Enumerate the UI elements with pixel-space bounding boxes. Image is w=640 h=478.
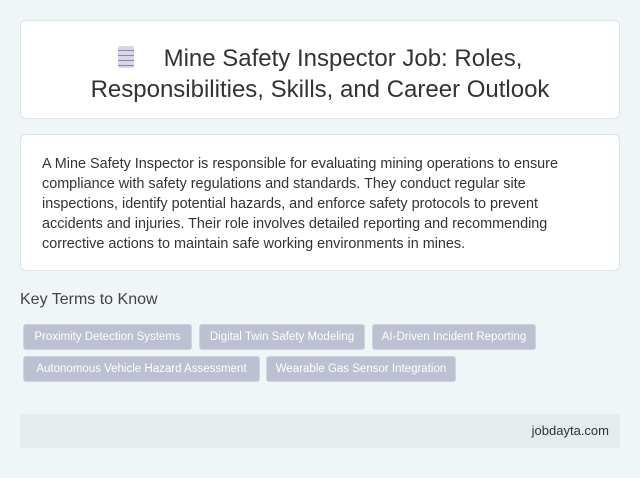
heading: key terms: Key Terms to Know	[20, 291, 158, 308]
icon: document	[118, 46, 134, 68]
description text: A Mine Safety Inspector is responsible for evaluating mining operations to ensure compliance with safety regulations and standards. They conduct regular site inspections, identify potential hazards, and enforce safety protocols to prevent accidents and injuries. Their role involves detailed reporting and recommending corrective actions to maintain safe working environments in mines.	[42, 156, 558, 252]
tag 4	[23, 356, 260, 382]
tag 2: Digital Twin Safety Modeling	[210, 331, 354, 343]
title	[91, 45, 550, 103]
tag 2	[199, 324, 365, 350]
footer	[20, 414, 620, 448]
title: Responsibilities, Skills, and Career Outlook	[91, 76, 549, 103]
tag 3: AI-Driven Incident Reporting	[382, 331, 526, 343]
title card	[20, 20, 620, 119]
tag 3	[372, 324, 536, 350]
tag 1	[23, 324, 192, 350]
tag 5: Wearable Gas Sensor Integration	[276, 363, 446, 375]
tag 5	[266, 356, 456, 382]
footer text: jobdayta.com	[532, 423, 609, 438]
tag 4: Autonomous Vehicle Hazard Assessment	[36, 363, 247, 375]
title: Mine Safety Inspector Job: Roles,	[164, 45, 522, 72]
tag 1: Proximity Detection Systems	[34, 331, 181, 343]
description card	[20, 134, 620, 271]
